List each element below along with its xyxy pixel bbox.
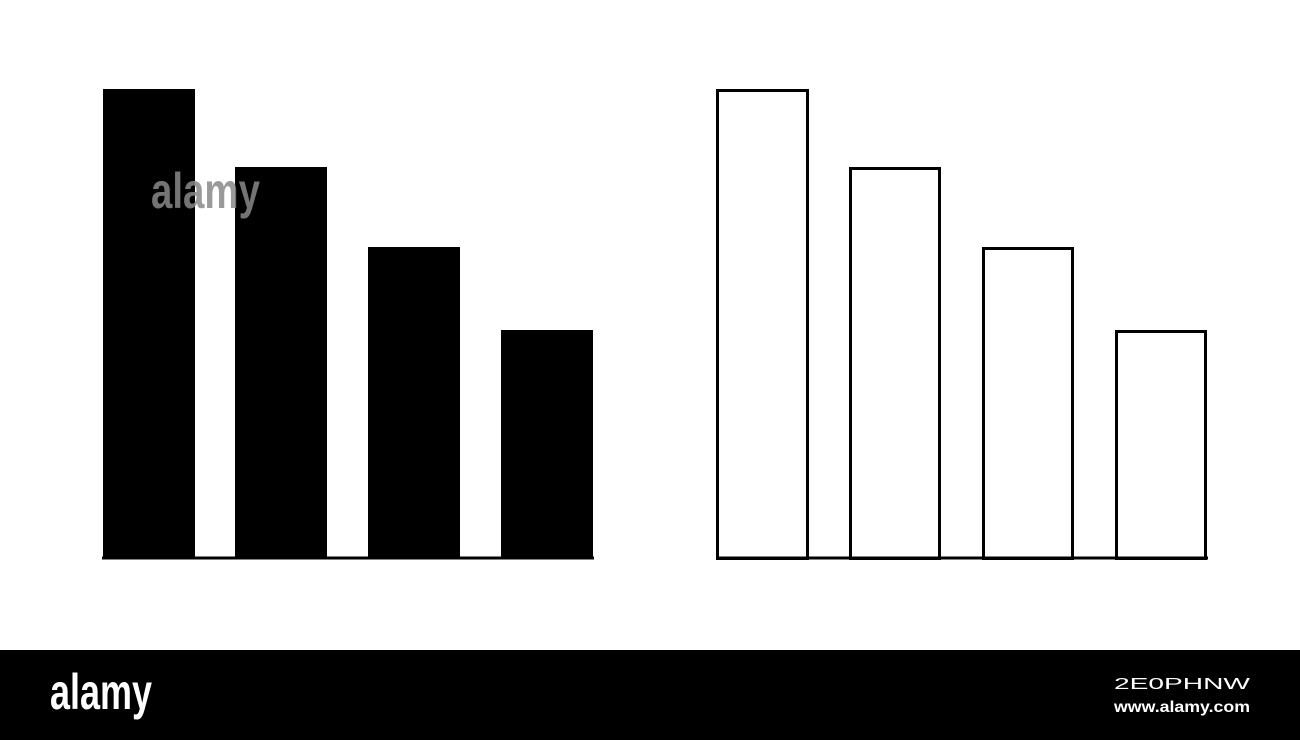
website text: www.alamy.com	[1113, 699, 1250, 716]
image id text: 2E0PHNW	[1114, 676, 1252, 693]
footer band	[0, 650, 1300, 740]
bar chart: filled bars	[102, 89, 594, 560]
watermark: alamy	[151, 163, 260, 219]
bar chart: outline bars	[716, 90, 1208, 558]
logo: alamy: alamy	[50, 664, 152, 720]
